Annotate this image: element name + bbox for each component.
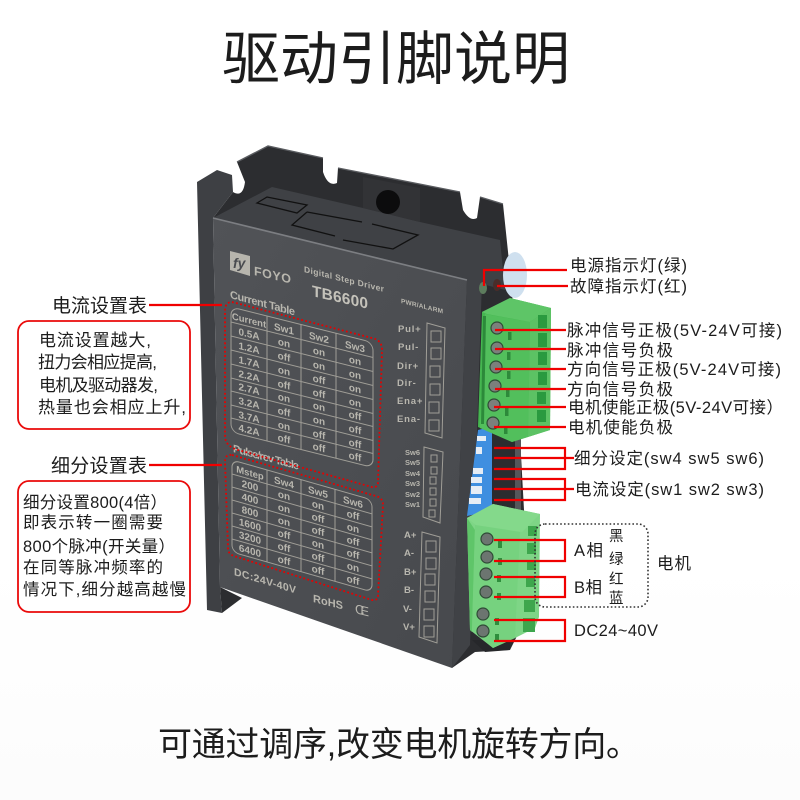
right labels: signal terminals: 方向信号负极 <box>567 380 673 399</box>
leader brackets: dip switches <box>494 448 574 500</box>
current table red dotted outline <box>225 302 382 487</box>
front top edge highlight <box>213 218 467 280</box>
signal pin labels: Dir- <box>397 378 417 389</box>
front face <box>213 218 467 668</box>
back flange <box>213 146 524 668</box>
right labels: motor phases: 红 <box>609 571 624 588</box>
product name: TB6600 <box>312 283 368 313</box>
current table: on <box>278 365 290 379</box>
pulse table: off <box>278 528 291 543</box>
right labels: motor phases <box>574 529 692 607</box>
current table: on <box>313 360 325 373</box>
pulse table: 200 <box>242 479 259 495</box>
dip switch <box>467 426 521 516</box>
right labels: motor phases: 蓝 <box>609 590 624 607</box>
current table: off <box>278 351 291 365</box>
red LED <box>493 279 501 291</box>
leader brackets: motor and power <box>494 540 565 641</box>
current table: Sw1 <box>274 322 294 338</box>
motor and power pin labels: B- <box>404 585 414 596</box>
pulse table: off <box>278 541 291 556</box>
motor and power pin labels: A- <box>404 548 414 559</box>
callout: current note: 热量也会相应上升, <box>38 398 186 417</box>
right labels: motor phases: B相 <box>574 578 602 597</box>
current table: 2.7A <box>238 382 260 398</box>
upper green connector <box>478 298 551 442</box>
top slots <box>257 197 418 249</box>
motor and power pin labels: B+ <box>404 567 417 578</box>
pulse table: Sw6 <box>343 495 363 511</box>
pulse table: on <box>347 522 359 536</box>
left side plate <box>197 170 233 613</box>
callout: current note: 电流设置越大, <box>39 331 151 350</box>
right labels: signal terminals: 方向信号正极(5V-24V可接) <box>567 360 781 379</box>
switch labels <box>405 447 443 523</box>
current table: 1.2A <box>238 341 260 357</box>
right labels: indicators: 电源指示灯(绿) <box>570 256 687 275</box>
pulse table: off <box>312 512 325 526</box>
pulse table: off <box>312 564 325 578</box>
current table: off <box>313 388 326 402</box>
screw bracket <box>363 177 420 222</box>
FOYO logo: fy <box>233 255 247 271</box>
current table: on <box>349 383 361 396</box>
switch labels: Sw5 <box>405 458 420 467</box>
current table: on <box>278 337 290 351</box>
pulse table heading: Pulse/rev Table <box>233 443 299 473</box>
motor dotted box <box>535 524 648 607</box>
current table: 3.7A <box>238 410 260 426</box>
pulse table: 3200 <box>239 530 261 547</box>
right labels: dip switch settings: 电流设定(sw1 sw2 sw3) <box>575 480 764 499</box>
FOYO logo <box>230 251 291 287</box>
DC rating and marks: RoHS <box>313 593 343 612</box>
right labels: signal terminals: 脉冲信号负极 <box>567 341 673 360</box>
signal pin labels: Pul- <box>398 342 419 353</box>
motor and power pin labels: A+ <box>404 530 417 541</box>
FOYO logo: FOYO <box>254 264 291 287</box>
switch labels: Sw6 <box>405 448 420 457</box>
pulse table red dotted outline <box>225 455 383 600</box>
DC rating and marks: CE <box>355 601 369 620</box>
right labels: motor phases: 绿 <box>609 551 624 568</box>
switch labels: Sw3 <box>405 479 420 488</box>
pulse table: Sw4 <box>274 475 294 492</box>
current table: Current <box>232 311 267 331</box>
right labels: signal terminals: 电机使能负极 <box>568 418 673 437</box>
right edge <box>452 280 482 668</box>
current table: off <box>349 424 362 438</box>
callout: microstep note <box>18 481 190 612</box>
current table: Sw2 <box>309 331 329 347</box>
current table: on <box>349 355 361 368</box>
signal pin labels: Pul+ <box>398 324 422 335</box>
callout: microstep note: 即表示转一圈需要 <box>23 513 163 532</box>
current table: off <box>278 433 291 447</box>
switch labels: Sw2 <box>405 490 420 499</box>
pulse table: off <box>312 525 325 539</box>
leader lines: indicators and signals <box>484 270 568 427</box>
current table heading: Current Table <box>230 289 295 318</box>
pulse table: off <box>347 509 360 523</box>
current table: off <box>349 451 362 465</box>
pulse table: on <box>312 499 324 513</box>
DC rating and marks <box>234 566 369 620</box>
DC rating and marks: DC:24V-40V <box>234 566 297 597</box>
lower green connector <box>467 504 540 652</box>
current table: off <box>313 429 326 443</box>
current table: 1.7A <box>238 355 260 371</box>
product name: Digital Step Driver <box>304 264 385 294</box>
callout: microstep note: 在同等脉冲频率的 <box>23 558 163 577</box>
mounting foot shadow <box>220 587 242 613</box>
current table: on <box>349 397 361 410</box>
left heading: current settings: 电流设置表 <box>52 295 147 317</box>
right label: power supply: DC24~40V <box>574 622 658 640</box>
green LED <box>479 282 487 294</box>
top surface <box>213 187 505 290</box>
pulse table: Sw5 <box>308 485 328 501</box>
current table: on <box>278 392 290 406</box>
current table: Sw3 <box>345 340 365 356</box>
flange top edge highlight <box>237 146 503 204</box>
screw <box>376 190 400 214</box>
bottom caption: 可通过调序,改变电机旋转方向。 <box>158 726 640 764</box>
pulse table: on <box>278 515 290 530</box>
product name <box>304 264 443 316</box>
pulse table: off <box>347 548 360 562</box>
switch labels: Sw1 <box>405 500 420 509</box>
callout: microstep note: 情况下,细分越高越慢 <box>23 579 186 599</box>
signal pin labels: Dir+ <box>397 361 419 372</box>
pulse table: on <box>312 538 324 552</box>
current table: on <box>349 369 361 382</box>
pulse table: Mstep <box>236 464 264 483</box>
pulse table: off <box>347 574 360 588</box>
right labels: dip switch settings: 细分设定(sw4 sw5 sw6) <box>574 449 764 468</box>
right labels: dip switch settings <box>574 449 764 499</box>
right labels: signal terminals: 电机使能正极(5V-24V可接） <box>568 398 783 417</box>
current table: on <box>313 415 325 428</box>
current table <box>231 307 373 468</box>
motor and power pin labels <box>403 530 440 643</box>
current table: 2.2A <box>238 369 260 385</box>
pulse table: off <box>312 551 325 565</box>
product name: PWR/ALARM <box>401 298 443 316</box>
current table: off <box>278 406 291 420</box>
pulse table: 800 <box>242 505 259 521</box>
switch labels: Sw4 <box>405 469 421 478</box>
right labels: indicators: 故障指示灯(红) <box>570 277 687 296</box>
current table: 3.2A <box>238 396 260 412</box>
current table: on <box>278 420 290 434</box>
callout: microstep note: 800个脉冲(开关量） <box>23 537 175 556</box>
pulse table: 400 <box>242 492 259 508</box>
callout: microstep note: 细分设置800(4倍） <box>23 493 167 512</box>
current table: 0.5A <box>238 327 260 343</box>
pulse table <box>232 460 372 592</box>
pulse table: on <box>278 489 290 504</box>
signal pin labels: Ena- <box>397 414 421 425</box>
current table: on <box>313 401 325 414</box>
signal pin labels <box>397 323 445 438</box>
motor and power pin labels: V- <box>403 604 412 615</box>
title: 驱动引脚说明 <box>222 27 570 92</box>
current table: off <box>349 410 362 424</box>
right labels: motor phases: 电机 <box>657 554 692 573</box>
pulse table: 6400 <box>239 543 261 560</box>
pulse table: off <box>347 535 360 549</box>
signal pin labels: Ena+ <box>397 396 423 407</box>
pulse table: off <box>278 554 291 569</box>
LED holder <box>503 252 527 298</box>
current table: off <box>313 442 326 456</box>
callout: current note <box>18 321 190 429</box>
callout: current note: 扭力会相应提高, <box>38 353 157 372</box>
pulse table: 1600 <box>239 517 261 534</box>
right labels: indicators <box>570 256 687 296</box>
current table: off <box>349 438 362 452</box>
motor and power pin labels: V+ <box>403 622 415 633</box>
current table: 4.2A <box>238 423 260 439</box>
right labels: signal terminals: 脉冲信号正极(5V-24V可接) <box>567 321 782 340</box>
left heading: microstep settings: 细分设置表 <box>51 455 147 477</box>
right labels: motor phases: 黑 <box>609 529 624 545</box>
pulse table: on <box>278 502 290 517</box>
current table: off <box>278 379 291 393</box>
right labels: signal terminals <box>567 321 783 437</box>
pulse table: on <box>347 561 359 575</box>
driver module <box>197 146 551 668</box>
right labels: motor phases: A相 <box>574 541 603 560</box>
current table: off <box>313 374 326 388</box>
current table: on <box>313 346 325 359</box>
callout: current note: 电机及驱动器发, <box>39 376 158 395</box>
